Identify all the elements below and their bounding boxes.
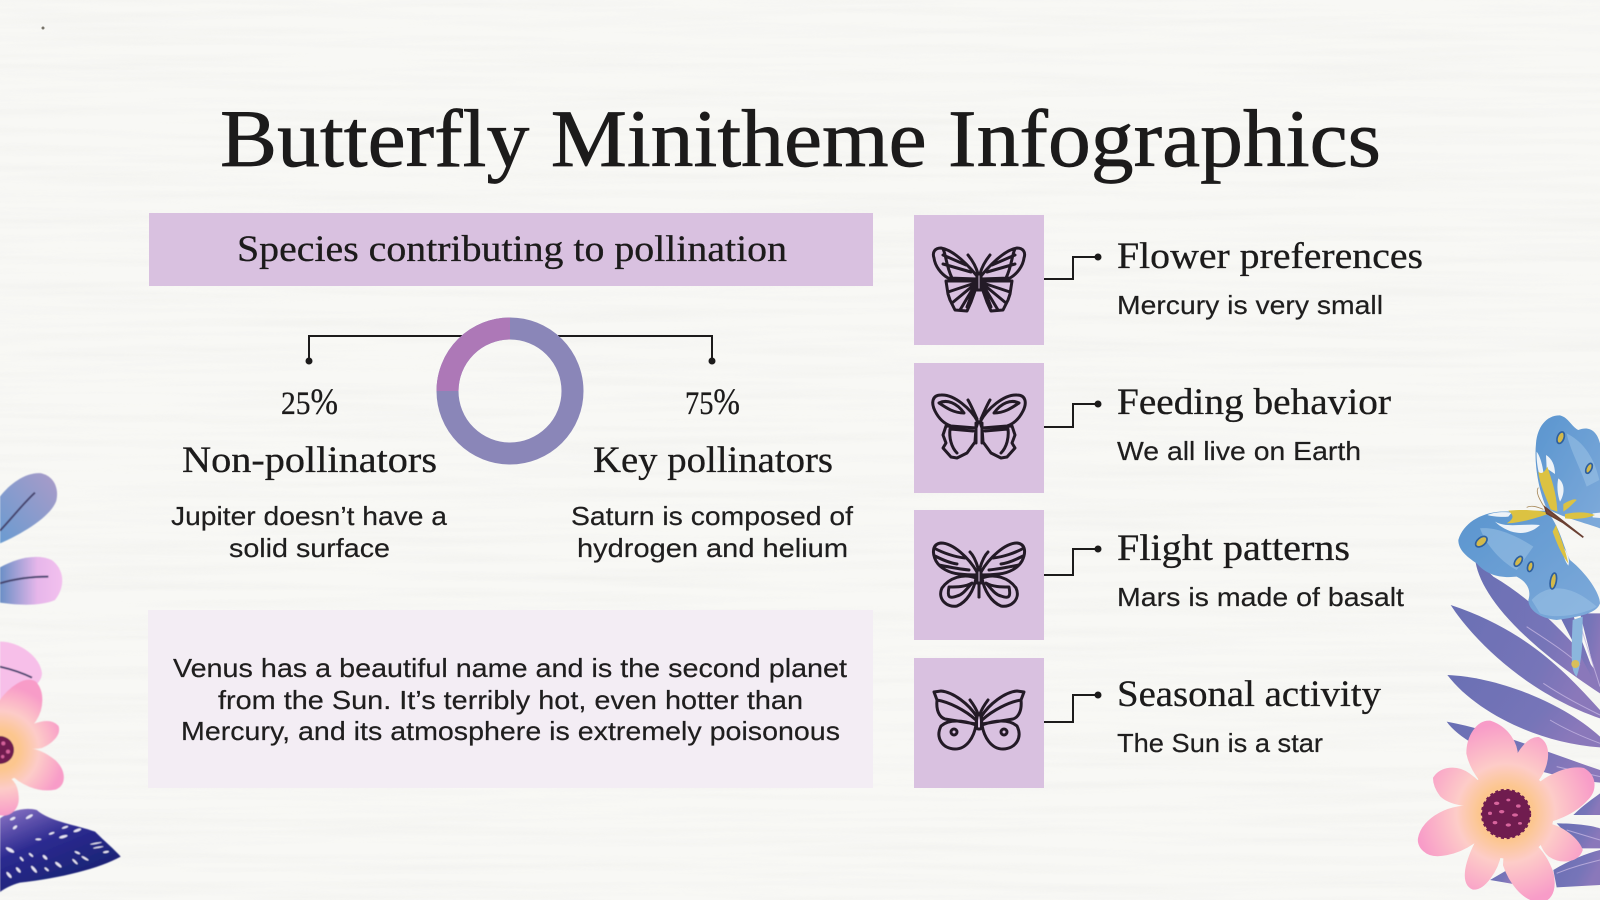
decoration: right florals [1420,415,1600,900]
panel: venus text [148,610,873,788]
panel: species contributing to pollination [149,213,873,286]
heading: Feeding behavior [1117,382,1391,423]
row: flower preferences [914,215,1423,345]
panel background: pale band [148,610,873,788]
value: 75%: 75% [685,382,740,423]
description: jupiter: solid surface [229,533,390,563]
icon tile [914,363,1044,493]
icon: flower center right [1482,790,1530,838]
paragraph: Mercury, and its atmosphere is extremely poisonous [181,716,840,746]
heading: Flight patterns [1117,528,1350,569]
row: seasonal activity [914,658,1382,788]
label: key pollinators: Key pollinators [593,440,833,481]
description: saturn [571,501,854,563]
icon: pink flower right [1420,723,1593,900]
paragraph: Venus has a beautiful name and is the second planet [173,653,848,683]
icon: pink leaf [0,642,42,701]
paragraph: from the Sun. It’s terribly hot, even hotter than [218,685,803,715]
icon: butterfly eyespots [934,691,1024,749]
icon: wing yellow rays [1507,467,1595,563]
description: Mars is made of basalt [1117,582,1405,612]
stat: non-pollinators [171,382,448,563]
paragraph [173,653,848,746]
heading: Seasonal activity [1117,674,1382,715]
icon tile [914,658,1044,788]
icon: purple leaves [1447,558,1600,887]
connector [1044,692,1102,722]
icon: dark spotted leaf [0,809,121,892]
description: saturn: hydrogen and helium [577,533,848,563]
row: flight patterns [914,510,1405,640]
connector: left bracket [306,336,462,364]
connector: right bracket [558,336,716,364]
panel background: header band [149,213,873,286]
description: jupiter [171,501,448,563]
heading: species: Species contributing to pollination [237,229,787,270]
description: Mercury is very small [1117,290,1383,320]
label: non-pollinators: Non-pollinators [182,440,437,481]
icon: leaf veins [1527,623,1600,873]
connector [1044,254,1102,279]
stat: key pollinators [571,382,854,563]
icon: blue feather leaf [0,473,57,543]
icon: wing light washes [1480,433,1599,616]
description: The Sun is a star [1117,728,1323,758]
heading: Flower preferences [1117,236,1423,277]
icon: blue butterfly [1458,415,1600,677]
row: feeding behavior [914,363,1391,493]
description: saturn: Saturn is composed of [571,501,854,531]
icon: butterfly striped [933,248,1025,311]
connector [1044,546,1102,575]
value: 25%: 25% [281,382,338,423]
icon: wing white rays [1487,452,1600,566]
icon tile [914,215,1044,345]
description: We all live on Earth [1117,436,1361,466]
decoration: left florals [0,473,121,892]
icon: pink flower left [0,681,62,814]
description: jupiter: Jupiter doesn’t have a [171,501,448,531]
icon: butterfly scalloped [933,395,1025,458]
donut chart [448,328,572,454]
title: Butterfly Minitheme Infographics [220,93,1381,184]
icon: flower center left [0,736,14,764]
icon: pink blue feather leaf [0,557,62,605]
icon tile [914,510,1044,640]
icon: butterfly banded [933,543,1025,606]
connector [1044,400,1102,427]
